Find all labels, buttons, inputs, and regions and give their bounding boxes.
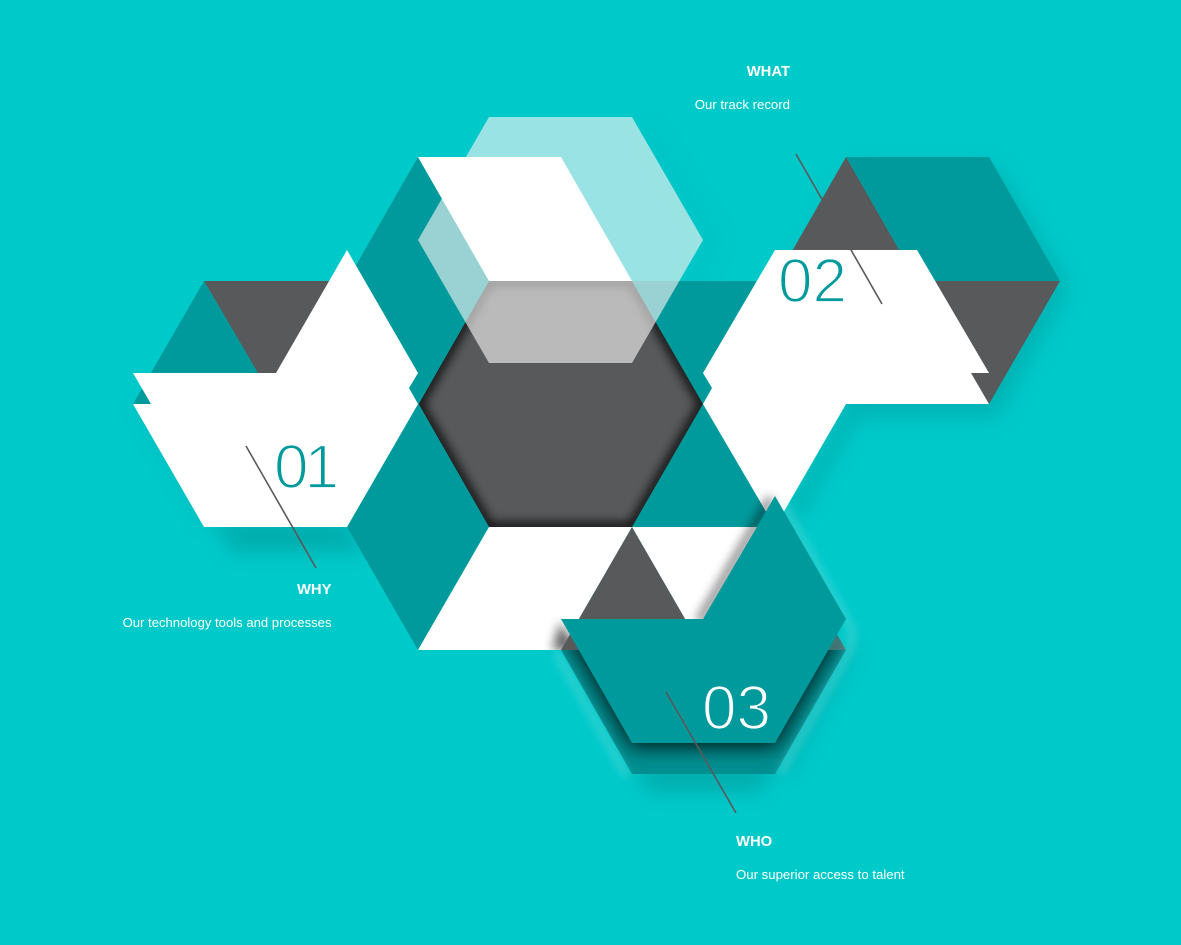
- lower hexagon teal base: [561, 650, 846, 774]
- lower hexagon dark sliver: [703, 527, 846, 650]
- right hexagon dark lower parallelogram: [846, 281, 1060, 404]
- right hexagon dark top triangle: [775, 157, 917, 281]
- dark triangle under lower hexagon: [561, 527, 703, 650]
- panel: lower teal hexagon: [561, 496, 846, 743]
- right hexagon teal parallelogram: [846, 157, 1060, 281]
- panel: lower hexagon back: [556, 503, 852, 776]
- label: what: Our track record: [695, 97, 790, 112]
- label: why: WHY: [297, 582, 332, 598]
- label: what: [695, 64, 790, 112]
- panel: central dark hexagon: [418, 281, 703, 527]
- panel: central teal and white facets: [347, 157, 775, 650]
- panel: left white hexagon: [133, 250, 418, 527]
- connector line 03: [666, 692, 736, 813]
- shadow of lower teal hexagon: [552, 498, 846, 747]
- light halo edges: [556, 503, 852, 776]
- number 03: 03: [702, 674, 771, 743]
- connector line 02: [796, 154, 882, 304]
- number 01: 01: [274, 433, 339, 502]
- label: who: WHO: [736, 834, 772, 850]
- panel: left hexagon back: [133, 281, 347, 404]
- label: what: WHAT: [747, 64, 790, 80]
- white parallelogram over translucent hexagon: [418, 157, 632, 281]
- connector line 01: [246, 446, 316, 568]
- panel: right hexagon back: [775, 157, 1060, 404]
- left hexagon dark triangle: [204, 281, 347, 404]
- number 02: 02: [778, 247, 847, 316]
- translucent top hexagon: [418, 117, 703, 363]
- label: why: Our technology tools and processes: [123, 615, 332, 630]
- label: who: Our superior access to talent: [736, 867, 905, 882]
- left hexagon teal triangle: [133, 281, 276, 404]
- label: who: [736, 834, 905, 882]
- soft shadows on background: [133, 125, 1068, 792]
- label: why: [123, 582, 332, 630]
- panel: right white hexagon: [703, 250, 989, 527]
